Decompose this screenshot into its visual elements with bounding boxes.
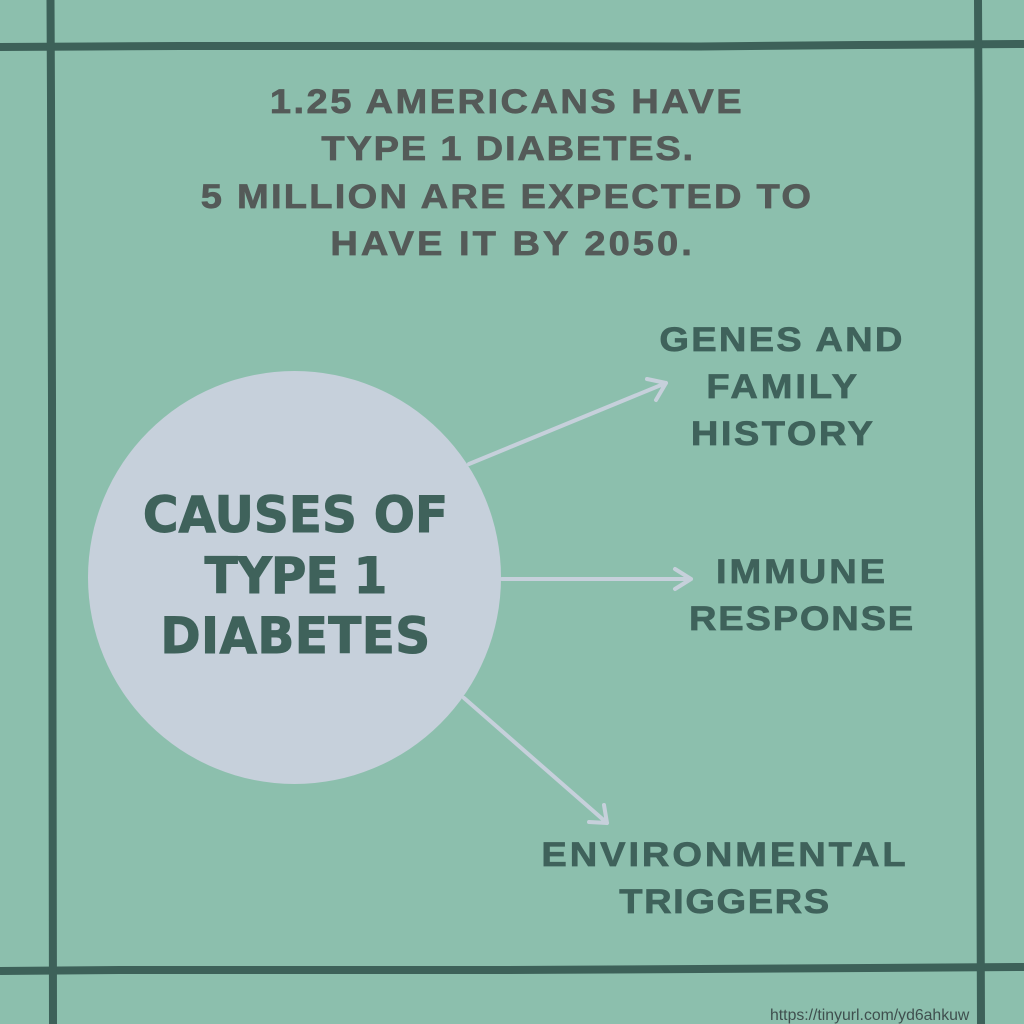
- circle title: TYPE 1: [205, 546, 386, 604]
- label: genes and family history: GENES AND: [659, 321, 905, 359]
- headline statistic: 1.25 AMERICANS HAVE: [270, 83, 744, 121]
- headline statistic: HAVE IT BY 2050.: [330, 225, 695, 263]
- label: immune response: [689, 553, 915, 638]
- label: genes and family history: [659, 321, 905, 453]
- headline statistic: TYPE 1 DIABETES.: [321, 130, 695, 168]
- circle title: DIABETES: [160, 607, 431, 665]
- source url: https://tinyurl.com/yd6ahkuw: [770, 1007, 969, 1024]
- headline statistic: 5 MILLION ARE EXPECTED TO: [201, 178, 813, 216]
- circle: causes of type 1 diabetes: [88, 371, 501, 784]
- label: environmental triggers: [541, 836, 909, 921]
- circle title: CAUSES OF: [143, 486, 448, 544]
- label: environmental triggers: ENVIRONMENTAL: [541, 836, 909, 874]
- label: immune response: IMMUNE: [716, 553, 888, 591]
- label: genes and family history: FAMILY: [706, 368, 860, 406]
- label: immune response: RESPONSE: [689, 600, 915, 638]
- label: genes and family history: HISTORY: [691, 415, 875, 453]
- label: environmental triggers: TRIGGERS: [619, 883, 831, 921]
- circle title: [143, 486, 448, 665]
- headline statistic: [201, 83, 813, 263]
